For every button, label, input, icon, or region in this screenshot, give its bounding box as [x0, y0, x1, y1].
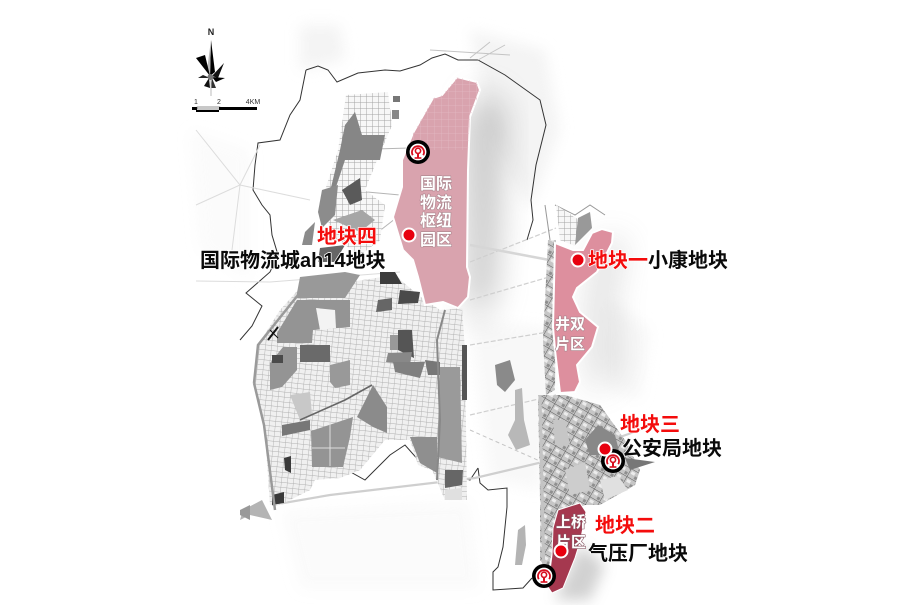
- label: plot 4: 国际物流城ah14地块: [200, 249, 386, 272]
- marker: plot 1: [572, 254, 584, 266]
- scale bar: 2: [217, 99, 221, 106]
- zone: 井双片区: [553, 229, 613, 393]
- terrain texture: [190, 25, 650, 590]
- marker: plot 3: [598, 442, 612, 456]
- label: plot 4: 地块四: [317, 225, 377, 248]
- map: southeast district: [538, 395, 655, 580]
- label: plot 2: 地块二: [595, 514, 655, 537]
- label: plot 2: [588, 514, 688, 565]
- label: plot 3: 公安局地块: [622, 437, 722, 460]
- icon: railway station south: [532, 564, 556, 588]
- label: 井双片区: 井双: [555, 316, 585, 333]
- label: 井双片区: 片区: [555, 336, 585, 353]
- scale bar: 4KM: [246, 99, 260, 106]
- marker: plot 2: [554, 544, 568, 558]
- zone: 国际物流枢纽园区: [393, 77, 480, 308]
- icon: north arrow: N: [208, 27, 214, 37]
- label: plot 1: 地块一小康地块: [588, 248, 728, 272]
- label: 国际物流枢纽园区: 园区: [420, 232, 452, 249]
- roads and boundaries: [196, 42, 640, 590]
- scale bar: [192, 99, 260, 112]
- label: 上桥片区: 上桥: [556, 513, 586, 531]
- label: 上桥片区: 片区: [556, 534, 586, 551]
- label: 国际物流枢纽园区: 物流: [420, 193, 452, 212]
- label: 国际物流枢纽园区: 国际: [420, 175, 452, 193]
- icon: railway station east: [601, 449, 625, 473]
- label: plot 4: [200, 225, 386, 272]
- label: plot 2: 气压厂地块: [588, 542, 688, 565]
- label: 上桥片区: [556, 513, 586, 551]
- label: 井双片区: [555, 316, 585, 353]
- zone shadows: [466, 90, 625, 600]
- label: plot 3: [620, 413, 722, 460]
- marker: plot 4: [402, 228, 416, 242]
- icon: railway station north: [406, 140, 430, 164]
- label: 国际物流枢纽园区: 枢纽: [420, 211, 452, 230]
- zone: 上桥片区: [548, 503, 586, 593]
- label: plot 3: 地块三: [620, 413, 680, 436]
- icon: north arrow: [196, 27, 225, 96]
- map: northern new town: [302, 92, 400, 262]
- map: satellite patches: [495, 205, 592, 565]
- label: 国际物流枢纽园区: [420, 175, 452, 249]
- scale bar: 1: [194, 99, 198, 106]
- map: central city: [240, 272, 467, 520]
